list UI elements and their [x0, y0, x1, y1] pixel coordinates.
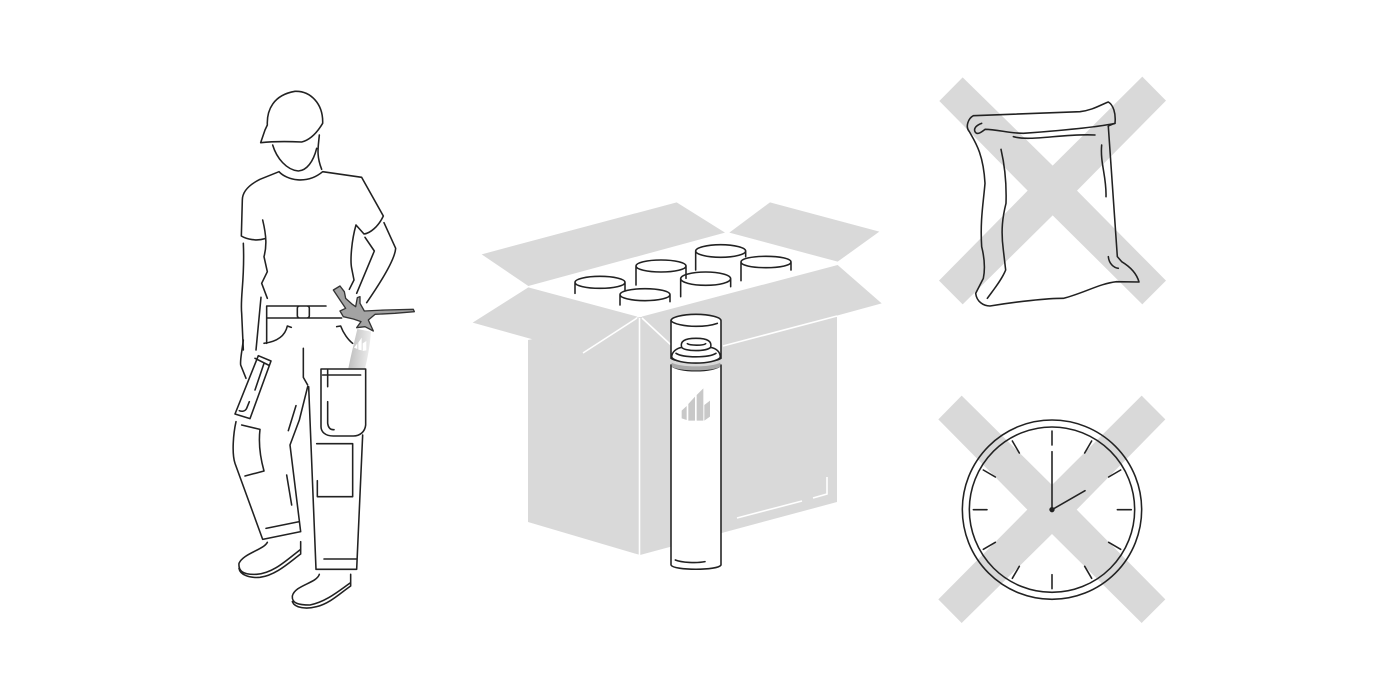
- cap rim: [671, 321, 717, 326]
- clock rings: [962, 420, 1142, 599]
- foam can: [671, 314, 721, 569]
- grey cross: [938, 396, 1165, 623]
- shoulder band: [672, 363, 720, 370]
- clock centre: [1049, 507, 1055, 512]
- t-shirt: [241, 172, 383, 298]
- cargo pocket: [321, 369, 366, 436]
- box body: [528, 317, 837, 555]
- can cap: [671, 314, 721, 362]
- belt and buckle: [267, 306, 342, 343]
- worker figure: [233, 91, 414, 608]
- can body: [671, 365, 721, 569]
- can 1: [575, 276, 625, 293]
- can 3: [696, 245, 746, 270]
- knee patch: [242, 425, 264, 476]
- can 4: [741, 256, 791, 281]
- open cardboard box: [473, 202, 882, 556]
- can parts: [671, 314, 721, 569]
- can 2: [636, 260, 686, 285]
- hour ticks: [973, 431, 1131, 589]
- front shoe: [292, 574, 351, 608]
- can 6: [620, 289, 670, 305]
- crossed out bag: [939, 77, 1166, 306]
- worker lower body: [233, 340, 366, 608]
- can 5: [681, 272, 731, 297]
- bag outline: [967, 102, 1139, 306]
- cans inside box: [575, 245, 791, 305]
- back right flap: [729, 202, 879, 262]
- left forearm: [241, 340, 246, 378]
- worker upper body: [241, 91, 396, 350]
- can body: [348, 329, 371, 368]
- grey cross: [939, 77, 1166, 304]
- bag folds: [975, 123, 1118, 298]
- can logo: [682, 388, 710, 421]
- box flaps: [473, 202, 882, 353]
- foam gun: [333, 286, 414, 331]
- trousers: [233, 348, 363, 569]
- front left flap: [473, 287, 637, 353]
- front right flap: [642, 265, 882, 347]
- cap: [261, 91, 323, 143]
- arms: [241, 223, 396, 350]
- valve details: [676, 344, 716, 357]
- foam can on gun: [333, 286, 414, 368]
- crossed out clock: [938, 396, 1165, 623]
- can base line: [675, 560, 705, 563]
- valve: [672, 338, 720, 363]
- clock hands: [1052, 452, 1085, 510]
- back left flap: [482, 202, 725, 286]
- face and neck: [273, 135, 322, 171]
- back shoe: [239, 542, 301, 578]
- leg pocket tool: [235, 356, 271, 419]
- box edges: [583, 316, 837, 556]
- trouser pockets: [264, 326, 353, 343]
- lower patch: [317, 444, 353, 497]
- can logo: [354, 338, 366, 351]
